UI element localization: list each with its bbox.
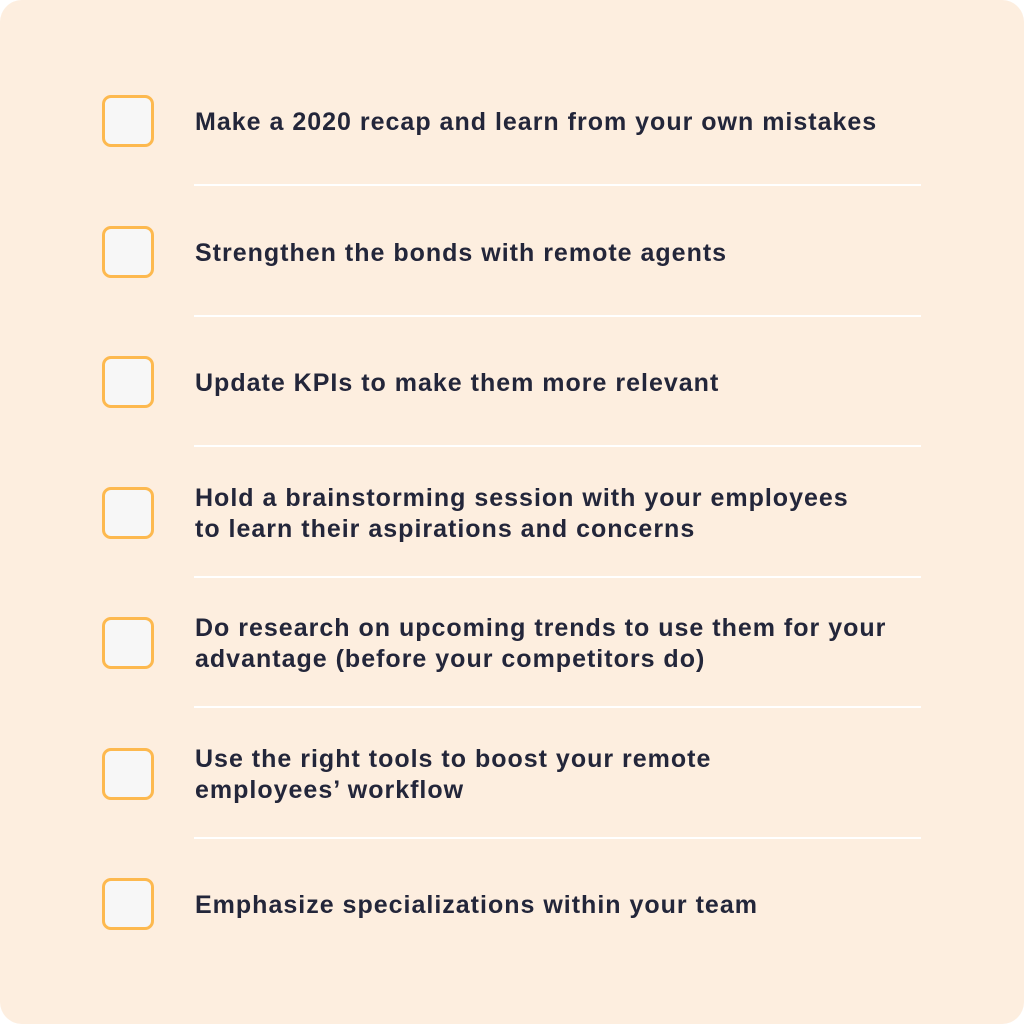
item 6 text: employees’ workflow [195, 776, 464, 804]
item 1 text: Make a 2020 recap and learn from your own mistakes [195, 108, 877, 136]
checkbox 1 [102, 95, 154, 147]
item 4 text: to learn their aspirations and concerns [195, 515, 695, 543]
checkbox 7 [102, 878, 154, 930]
checkbox 6 [102, 748, 154, 800]
item 7 text: Emphasize specializations within your team [195, 891, 758, 919]
item 3 text: Update KPIs to make them more relevant [195, 369, 719, 397]
item 5 text: advantage (before your competitors do) [195, 645, 705, 673]
checkbox 5 [102, 617, 154, 669]
checkbox 3 [102, 356, 154, 408]
checkbox 4 [102, 487, 154, 539]
item 4 text: Hold a brainstorming session with your employees [195, 484, 849, 512]
item 5 text [195, 614, 886, 673]
checkbox 2 [102, 226, 154, 278]
item 2 text: Strengthen the bonds with remote agents [195, 239, 727, 267]
item 5 text: Do research on upcoming trends to use them for your [195, 614, 886, 642]
item 6 text [195, 745, 711, 804]
item 4 text [195, 484, 849, 543]
item 6 text: Use the right tools to boost your remote [195, 745, 711, 773]
